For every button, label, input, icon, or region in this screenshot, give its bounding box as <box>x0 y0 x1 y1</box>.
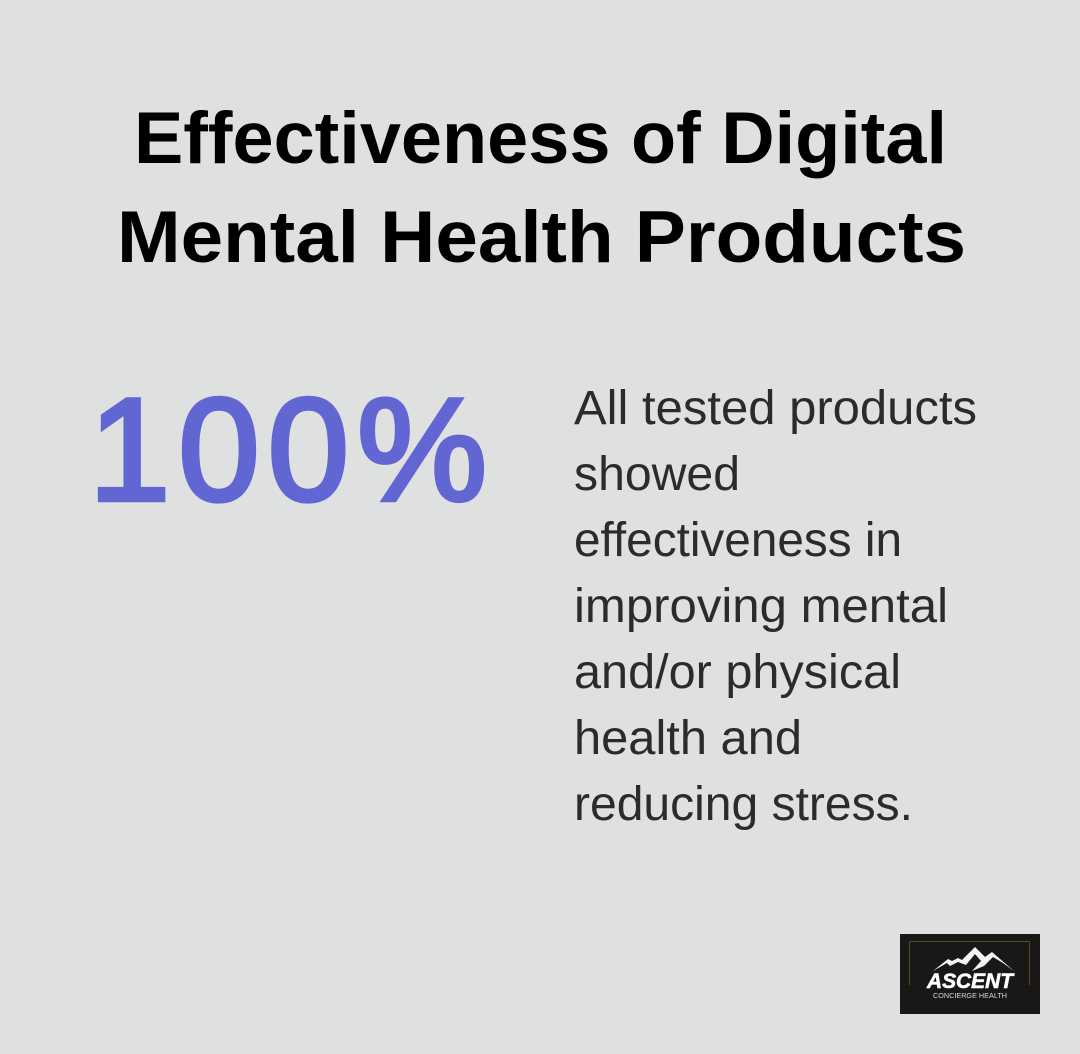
icon: mountains <box>933 947 1014 971</box>
description text: showed <box>574 448 740 501</box>
description text: improving mental <box>574 580 948 633</box>
title: Effectiveness of Digital <box>134 98 947 179</box>
logo: Ascent Concierge Health <box>900 934 1040 1014</box>
description text: reducing stress. <box>574 778 913 831</box>
description text <box>574 382 977 831</box>
big statistic: 100%: 100% <box>89 368 487 531</box>
description text: and/or physical <box>574 646 901 699</box>
description text: health and <box>574 712 802 765</box>
title <box>117 98 966 278</box>
title: Mental Health Products <box>117 197 966 278</box>
logo wordmark: ASCENT <box>926 970 1015 993</box>
logo subtitle: CONCIERGE HEALTH <box>933 991 1007 1000</box>
description text: All tested products <box>574 382 977 435</box>
description text: effectiveness in <box>574 514 902 567</box>
